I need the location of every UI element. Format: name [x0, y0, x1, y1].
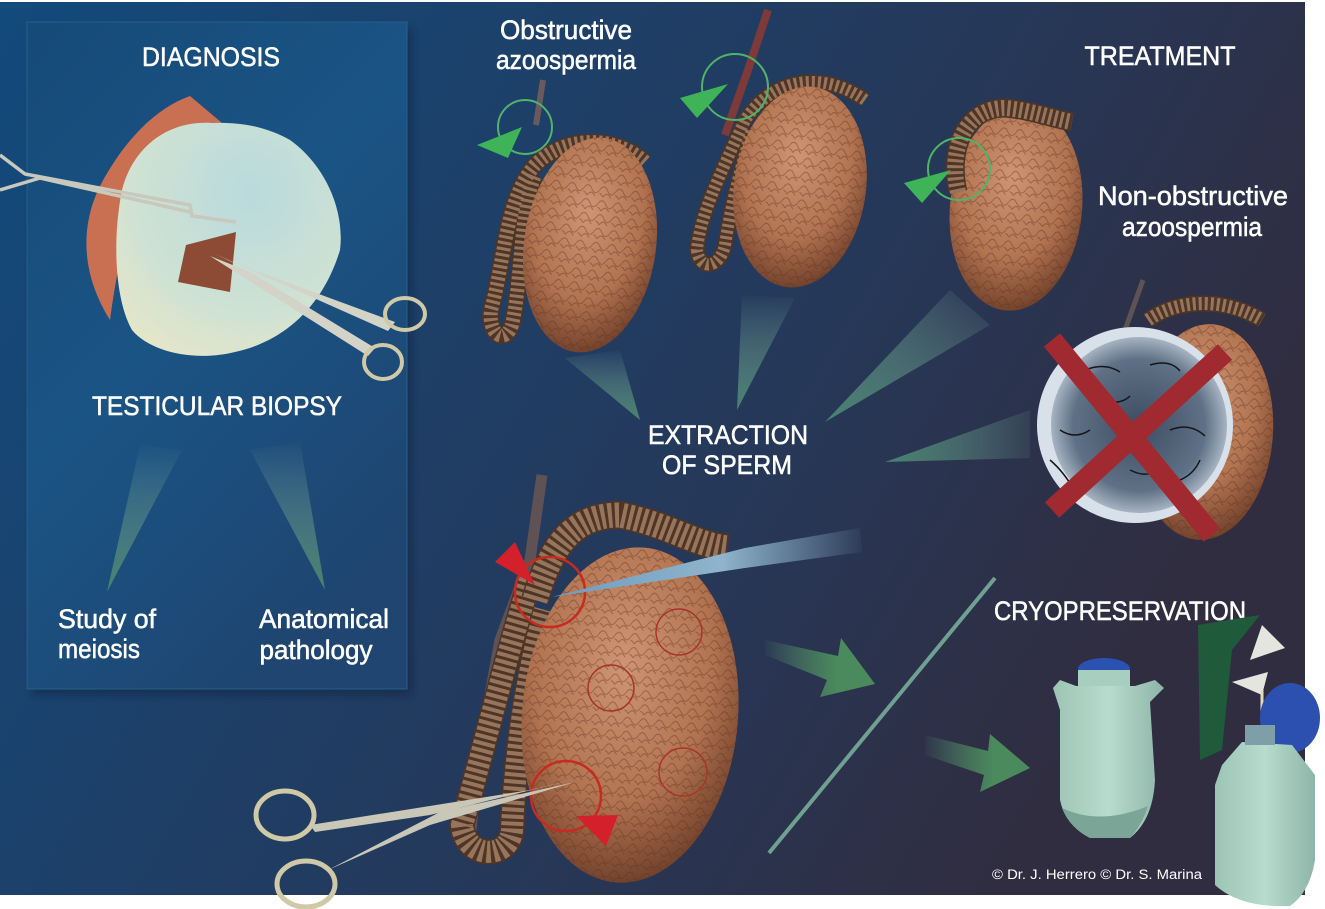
heading: obstructive azoospermia: Obstructive [500, 15, 632, 45]
heading: obstructive azoospermia: azoospermia [496, 45, 637, 75]
label: anatomical pathology: Anatomical [259, 604, 389, 634]
marker: green circle and arrow [680, 54, 768, 120]
arrow: to straw [765, 638, 875, 697]
arrow: testis 2 to extraction [737, 295, 795, 410]
testis with no-sperm lens [1037, 280, 1280, 544]
heading: diagnosis: DIAGNOSIS [142, 42, 280, 72]
credit: © Dr. J. Herrero © Dr. S. Marina [992, 867, 1203, 882]
open nitrogen tank [1215, 625, 1320, 906]
arrow: to tank [925, 734, 1030, 792]
panel: diagnosis [0, 22, 425, 695]
closed nitrogen tank [1053, 658, 1164, 838]
arrow: testis 3 to extraction [825, 290, 990, 422]
marker: green circle and arrow [477, 100, 552, 158]
label: testicular biopsy: TESTICULAR BIOPSY [92, 391, 342, 421]
arrow: to study of meiosis [107, 445, 182, 592]
heading: non-obstructive azoospermia: azoospermia [1122, 212, 1263, 242]
heading: treatment: TREATMENT [1084, 41, 1236, 71]
red arrows [495, 542, 618, 846]
arrow: non-obstructive to extraction [885, 410, 1030, 462]
heading: non-obstructive azoospermia: Non-obstructive [1098, 181, 1288, 211]
testis 1 [477, 80, 670, 361]
label: cryopreservation: CRYOPRESERVATION [994, 596, 1246, 626]
illustration: testicular biopsy with forceps [0, 96, 425, 379]
label: study of meiosis: Study of [58, 604, 156, 634]
extraction site markers [515, 557, 707, 831]
scissors [256, 778, 580, 907]
label: extraction of sperm: EXTRACTION [648, 420, 808, 450]
straw [769, 578, 995, 853]
green light beam [1198, 615, 1260, 760]
arrow: testis 1 to extraction [565, 350, 640, 420]
arrow: to anatomical pathology [250, 442, 325, 590]
label: extraction of sperm: OF SPERM [662, 450, 792, 480]
testis 3 [904, 99, 1092, 317]
testis 2 [680, 10, 879, 296]
marker: green circle and arrow [904, 138, 990, 203]
label: anatomical pathology: pathology [260, 635, 373, 665]
label: study of meiosis: meiosis [58, 634, 140, 664]
red cross [1052, 340, 1225, 535]
large testis with extraction sites [462, 475, 752, 892]
micropipette [552, 528, 862, 597]
